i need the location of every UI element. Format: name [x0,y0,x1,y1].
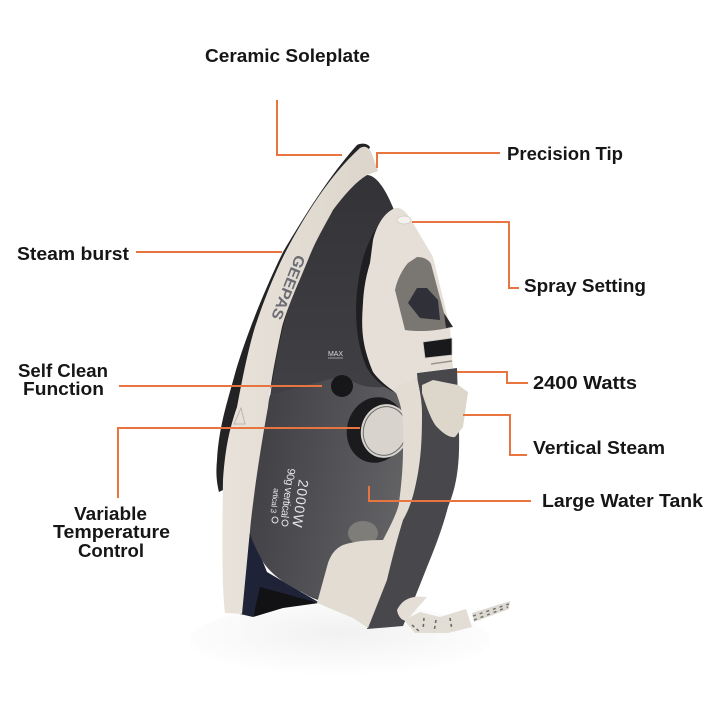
callout: Variable Temperature Control: Variable [74,504,147,524]
iron product photo [216,144,510,633]
callout: Variable Temperature Control: Temperature [53,522,170,542]
callout: Vertical Steam: Vertical Steam [533,438,665,458]
callout: Variable Temperature Control: Control [78,541,144,561]
cord spiral marks [412,618,452,632]
cord strain relief [397,597,427,620]
top spray cap [397,216,411,224]
tank specifications: 2000W [289,479,312,529]
spray window [395,257,448,331]
warning triangle [234,408,245,424]
temperature dial [339,391,415,469]
callout: Large Water Tank: Large Water Tank [542,491,704,511]
MAX mark: MAX [328,351,343,358]
soleplate edge [216,144,370,492]
self-clean button [331,375,353,397]
steam scale [431,361,452,364]
callout: Precision Tip: Precision Tip [507,144,623,164]
power switch [423,338,452,358]
callout: Precision Tip [377,144,623,168]
rear handle dark [367,368,459,629]
braided cord [472,601,510,622]
callout: Vertical Steam [463,415,665,458]
callout: 2400 Watts [457,372,637,393]
water tank [250,375,412,598]
callout: Spray Setting [412,222,646,296]
floor reflection [190,604,490,676]
upper handle cream [362,208,453,400]
callout: Large Water Tank [369,486,704,511]
tank specifications: artical 3 [268,488,281,514]
steam trigger [422,380,468,437]
tank inlet highlight [348,521,378,545]
callout: Self Clean Function: Self Clean [18,361,108,381]
callout: 2400 Watts: 2400 Watts [533,373,637,393]
callout: Ceramic Soleplate: Ceramic Soleplate [205,46,370,66]
callout: Self Clean Function: Function [23,379,104,399]
tank specifications [268,468,312,529]
callout: Self Clean Function [18,361,322,399]
callout: Steam burst: Steam burst [17,244,129,264]
callout: Ceramic Soleplate [205,46,370,155]
callout: Variable Temperature Control [53,428,360,561]
brand mark: GEEPAS [267,253,308,322]
dark body [250,175,415,600]
callout: Spray Setting: Spray Setting [524,276,646,296]
tank specifications: 90g vertical [278,468,297,519]
spray button [408,288,440,320]
navy base wedge [240,530,320,617]
spray tab [444,313,453,328]
front handle strip [317,378,422,628]
cord spiral [404,609,472,633]
black stand wedge [253,587,319,617]
black crescent along handle [356,212,396,392]
cream outer strip [222,147,378,614]
